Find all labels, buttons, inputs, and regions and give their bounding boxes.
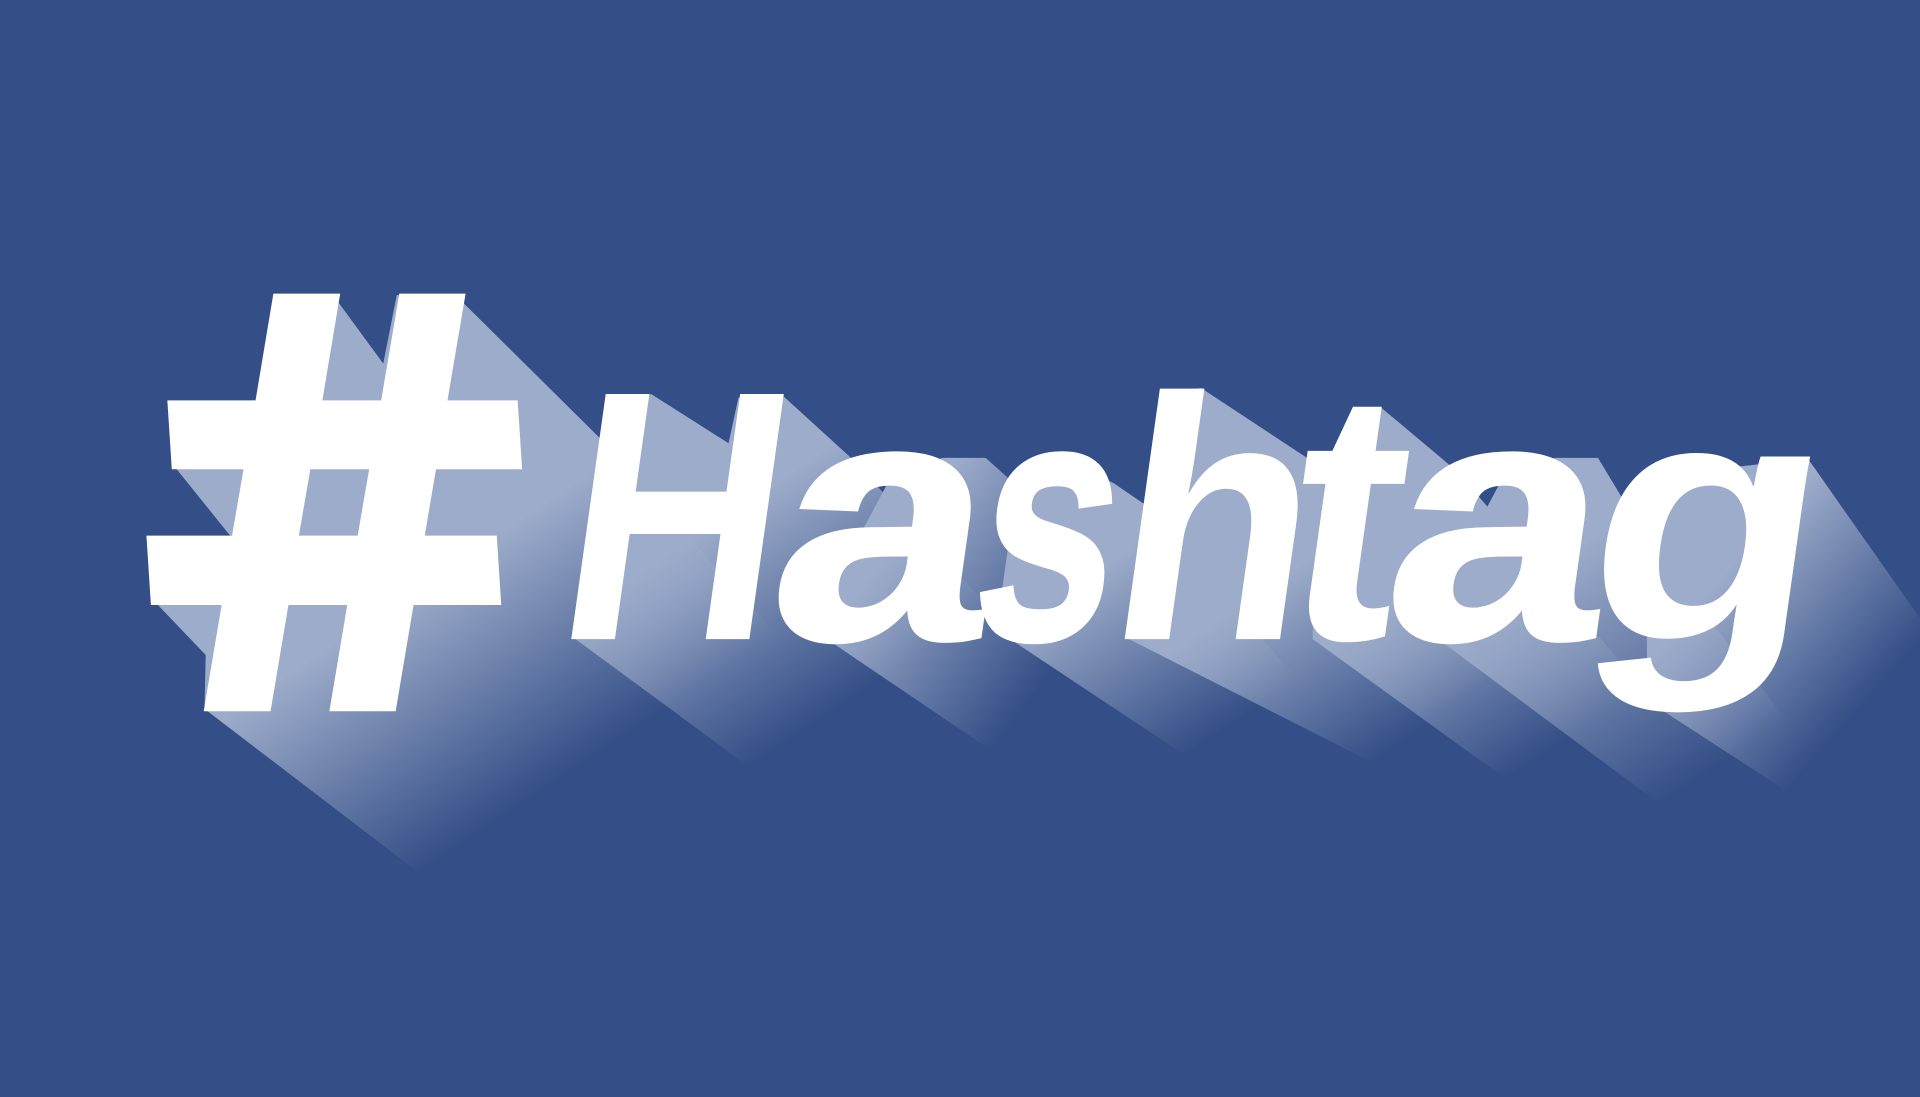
shadow: hash symbol [153,295,784,875]
letter g: g [1567,327,1854,715]
shadow: letter t [1313,408,1641,784]
long shadows [153,295,1920,875]
letter a: a [1367,326,1638,712]
word: Hashtag [540,316,1854,715]
letter t: t [1266,316,1434,715]
letter h: h [1092,327,1344,713]
shadow: letter h [1129,388,1494,765]
letter a: a [753,326,1023,712]
shadow: second letter a [1408,458,1788,808]
letter s: s [956,327,1149,713]
shadow: first letter a [796,458,1176,759]
shadow: letter s [998,455,1335,753]
shadow: letter H [576,394,1016,765]
shadow: letter g [1629,458,1920,796]
letter H: H [540,318,815,715]
hash symbol: # [92,179,578,841]
